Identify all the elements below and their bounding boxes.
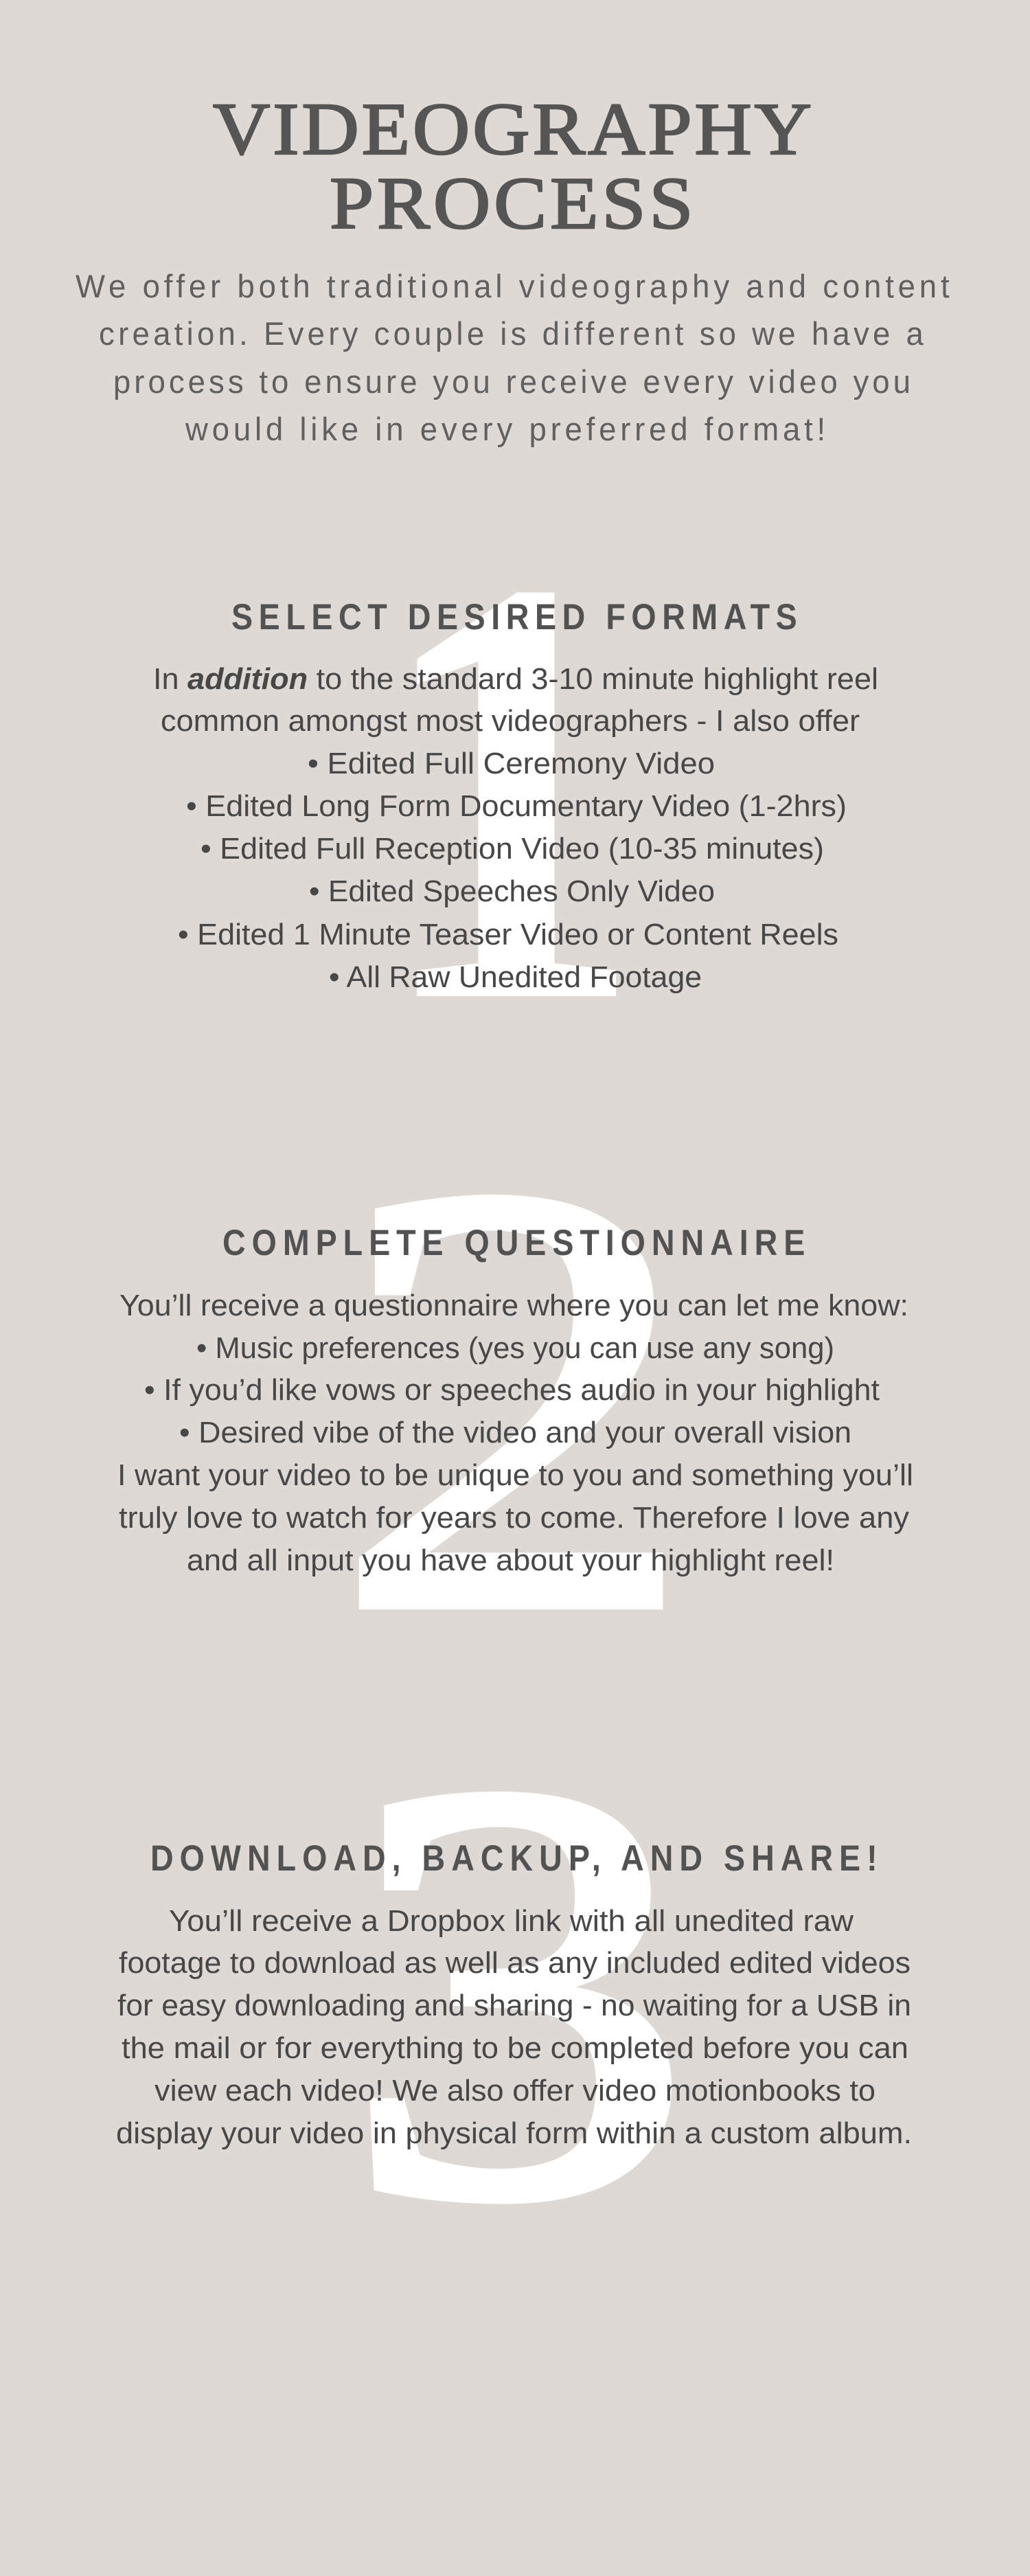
intro text block: creation. Every couple is different so we have a [99,315,924,352]
text block: format list: • Edited Full Reception Video (10-35 minutes) [201,832,824,866]
text block: delivery details: footage to download as well as any included edited videos [119,1946,911,1980]
panel: step 1 select desired formats [153,451,878,1129]
heading: select desired formats: SELECT DESIRED FORMATS [231,596,797,637]
text block: format list: • Edited 1 Minute Teaser Video or Content Reels [178,918,838,951]
text block: delivery details: view each video! We also offer video motionbooks to [154,2074,876,2108]
text block: delivery details: the mail or for everything to be completed before you can [122,2031,908,2065]
numeral 3: 3 [343,1660,692,2322]
text block: delivery details [116,1904,912,2150]
text block: delivery details: display your video in physical form within a custom album. [116,2116,912,2150]
title [213,88,812,245]
text block: format list: common amongst most videographers - I also offer [161,704,860,738]
text block: delivery details: for easy downloading and sharing - no waiting for a USB in [117,1989,911,2022]
text block: questionnaire details: • If you’d like vows or speeches audio in your highlight [144,1373,880,1407]
text block: format list: • Edited Speeches Only Video [309,874,715,908]
heading: complete questionnaire: COMPLETE QUESTIONNAIRE [222,1222,805,1263]
heading: download, backup, and share: DOWNLOAD, BACKUP, AND SHARE! [150,1838,878,1879]
intro text block: We offer both traditional videography and content [76,268,950,304]
text block: format list [153,662,878,994]
text block: questionnaire details: truly love to watch for years to come. Therefore I love any [119,1501,909,1535]
numeral 2: 2 [334,1061,696,1737]
intro text block: process to ensure you receive every video you [113,363,911,400]
panel: step 3 download, backup, and share [116,1660,912,2322]
text block: questionnaire details: and all input you have about your highlight reel! [187,1544,834,1577]
text block: questionnaire details [117,1289,913,1577]
intro text block [76,268,950,447]
text block: delivery details: You’ll receive a Dropbox link with all unedited raw [169,1904,854,1938]
title: VIDEOGRAPHY [213,88,812,170]
text block: questionnaire details: I want your video to be unique to you and something you’ll [117,1458,913,1492]
text block: format list: In addition to the standard 3-10 minute highlight reel [153,662,878,696]
text block: format list: • All Raw Unedited Footage [329,960,702,994]
panel: step 2 complete questionnaire [117,1061,913,1737]
title: PROCESS [330,162,694,245]
text block: format list: • Edited Long Form Documentary Video (1-2hrs) [186,789,847,823]
text block: questionnaire details: You’ll receive a questionnaire where you can let me know: [119,1289,908,1322]
intro text block: would like in every preferred format! [185,411,825,447]
numeral 1: 1 [374,451,644,1129]
text block: format list: • Edited Full Ceremony Video [308,747,715,780]
text block: questionnaire details: • Music preferences (yes you can use any song) [196,1331,834,1365]
text block: questionnaire details: • Desired vibe of the video and your overall vision [179,1416,851,1449]
